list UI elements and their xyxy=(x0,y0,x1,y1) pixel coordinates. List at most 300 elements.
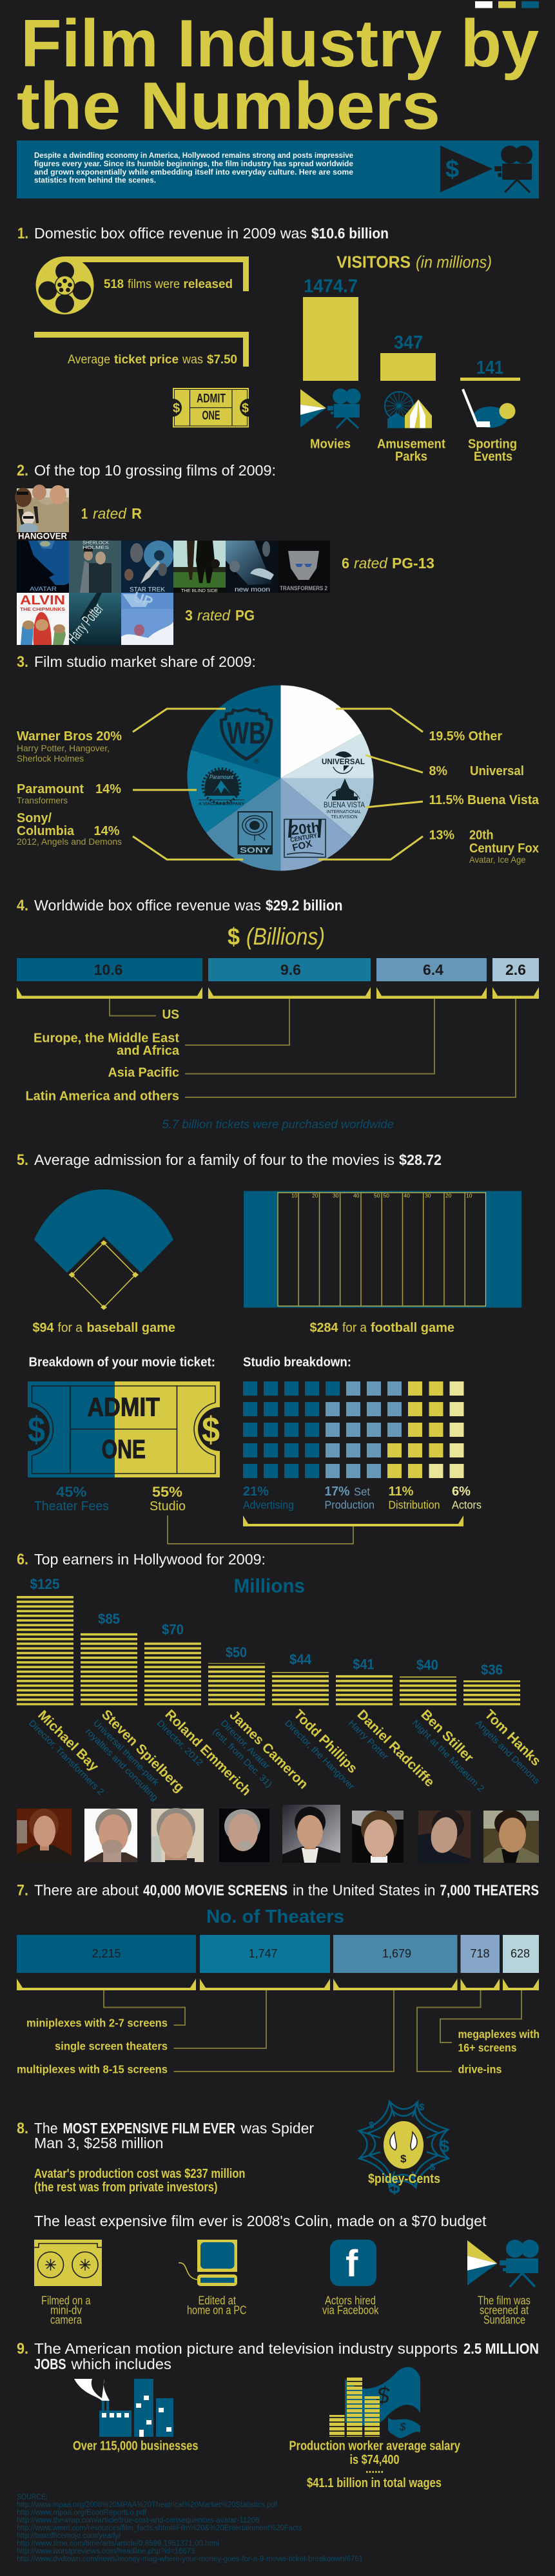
logo: 20th Century Fox: CENTURY xyxy=(290,832,318,844)
icon: football field: 20 xyxy=(312,1192,318,1198)
labels: left studios: Sherlock Holmes xyxy=(17,753,84,764)
heading 8: Man 3, $258 million xyxy=(34,2135,164,2151)
bar chart: visitors: 347 xyxy=(394,332,423,353)
region labels: US xyxy=(162,1008,179,1022)
icon: spidey-cents: $ xyxy=(400,2153,407,2165)
posters: PG-13 rated: SHERLOCK xyxy=(83,541,109,545)
region labels xyxy=(26,1008,180,1103)
logo: Warner Bros: WB xyxy=(227,716,266,751)
labels: right studios xyxy=(429,729,540,865)
icon: spidey-cents: $ xyxy=(430,2162,436,2173)
logo: Universal: UNIVERSAL xyxy=(322,758,365,766)
labels: left studios: 2012, Angels and Demons xyxy=(17,836,122,847)
icon: spidey-cents: $ xyxy=(389,2175,400,2198)
pie leader lines xyxy=(133,709,423,860)
icon: admit one ticket: ONE xyxy=(202,409,220,423)
portrait: Steven Spielberg xyxy=(84,1809,137,1862)
stacked bar: worldwide revenue: 9.6 xyxy=(280,961,301,978)
bar chart: top earners: $85 xyxy=(98,1611,120,1627)
label: 6 rated PG-13: PG-13 xyxy=(392,555,434,572)
posters: PG rated: THE CHIPMUNKS xyxy=(20,606,65,612)
bar chart: top earners: $70 xyxy=(162,1621,184,1638)
slice: Other xyxy=(281,686,362,778)
icon: large ticket split: ADMIT xyxy=(88,1392,160,1421)
portraits row xyxy=(17,1805,539,1863)
rotated earner names: James Cameron xyxy=(226,1707,311,1792)
posters: PG-13 rated: new moon xyxy=(235,586,270,593)
note: avatar cost: (the rest was from private investors) xyxy=(34,2180,218,2195)
slice: 20th Century Fox xyxy=(281,778,352,871)
icon: large ticket split: ONE xyxy=(102,1434,146,1464)
icon: projector camera xyxy=(467,2240,539,2287)
bar chart: top earners: $36 xyxy=(481,1662,503,1678)
labels: studio breakdown: Set xyxy=(354,1485,370,1498)
stacked bar: theaters: 1,747 xyxy=(248,1947,278,1960)
posters: PG-13 rated: STAR TREK xyxy=(130,586,165,593)
label: 6 rated PG-13: rated xyxy=(354,555,388,572)
heading 8: MOST EXPENSIVE FILM EVER xyxy=(63,2120,235,2137)
slice: Universal xyxy=(281,733,374,778)
icon: football field: 50 xyxy=(374,1192,380,1198)
subheading: studio breakdown: Studio breakdown: xyxy=(243,1356,351,1370)
icon: football field: 30 xyxy=(425,1192,431,1198)
captions: how Colin was made: screened at xyxy=(480,2304,529,2317)
UP title: UP xyxy=(131,588,155,610)
region labels: Europe, the Middle East xyxy=(34,1031,179,1045)
caption: wages: $41.1 billion in total wages xyxy=(307,2476,442,2490)
captions: how Colin was made: Sundance xyxy=(483,2313,525,2326)
heading 9: 9. xyxy=(17,2340,28,2358)
icon: facebook: f xyxy=(346,2243,358,2285)
rotated earner names: Daniel Radcliffe xyxy=(354,1707,437,1790)
captions: how Colin was made: Filmed on a xyxy=(41,2294,91,2307)
labels: ticket split: 45% xyxy=(56,1484,86,1500)
labels: left studios: Harry Potter, Hangover, xyxy=(17,743,110,753)
label: 3 rated PG: rated xyxy=(197,607,231,624)
heading 4 xyxy=(17,897,343,914)
sources: http://www.dvdtown.com/news/money-mag-where-your-money-goes-for-a-9-movie-ticket-breakdown/6761 xyxy=(17,2555,363,2563)
ticket price bracket xyxy=(34,332,249,367)
logo: Paramount: Paramount xyxy=(209,774,233,781)
stacked bar: worldwide revenue xyxy=(17,958,539,981)
icon: dollar projector camera xyxy=(440,146,532,192)
label: baseball cost: baseball game xyxy=(86,1321,175,1335)
labels: ticket split: Studio xyxy=(150,1499,186,1514)
rotated earner names: royalties and consulting xyxy=(84,1726,161,1803)
label: 6 rated PG-13 xyxy=(342,555,434,572)
logo: Warner Bros: ® xyxy=(254,758,259,765)
logo: Sony xyxy=(239,812,272,854)
labels: studio breakdown: Advertising xyxy=(243,1499,294,1512)
label: football cost xyxy=(309,1321,454,1335)
icon: spidey-cents: $ xyxy=(419,2102,425,2113)
icon: admit one ticket: $ xyxy=(173,401,180,416)
posters: PG-13 rated: HOLMES xyxy=(83,544,109,550)
labels: left studios: Columbia xyxy=(17,824,75,838)
sources: http://www.mpaa.org/EconReportLo.pdf xyxy=(17,2509,147,2517)
logo: 20th Century Fox xyxy=(284,819,326,857)
icon: large ticket split: $ xyxy=(28,1409,45,1450)
label: baseball cost xyxy=(32,1321,175,1335)
chart title: billions: (Billions) xyxy=(246,923,325,950)
stacked bar: theaters: 2,215 xyxy=(92,1947,121,1960)
heading 5: 5. xyxy=(17,1151,28,1169)
logo: 20th Century Fox: FOX xyxy=(291,838,313,854)
label: 3 rated PG xyxy=(185,607,255,624)
logo: Buena Vista: INTERNATIONAL xyxy=(326,809,361,814)
posters: PG rated: ALVIN xyxy=(20,593,65,608)
posters: PG-13 rated: TRANSFORMERS 2 xyxy=(280,585,327,592)
films released text: films were xyxy=(128,278,180,291)
theater leader lines xyxy=(104,1990,521,2071)
caption: wages: Production worker average salary xyxy=(289,2439,461,2454)
title: the Numbers xyxy=(17,69,440,144)
bar chart: visitors xyxy=(303,276,520,381)
captions: how Colin was made: Actors hired xyxy=(325,2294,376,2307)
bar chart: top earners: $40 xyxy=(416,1657,438,1673)
films released text: 518 xyxy=(104,278,124,291)
studio bracket and leader xyxy=(168,1515,463,1544)
title xyxy=(17,6,539,144)
note: tickets purchased: 5.7 billion tickets were purchased worldwide xyxy=(162,1118,394,1131)
captions: how Colin was made: Edited at xyxy=(199,2294,236,2307)
labels: studio breakdown: 11% xyxy=(388,1485,414,1499)
labels: studio breakdown xyxy=(243,1485,482,1512)
label: 3 rated PG: PG xyxy=(235,607,255,624)
rotated earner names: Michael Bay xyxy=(35,1707,102,1774)
label: 1 rated R: R xyxy=(131,505,142,522)
logo: Paramount xyxy=(199,769,245,807)
icon: spidey-cents: $ xyxy=(440,2137,449,2156)
visitor category labels xyxy=(310,437,517,464)
slice: Paramount xyxy=(187,750,281,832)
labels: right studios: 19.5% Other xyxy=(429,729,502,744)
slice: Buena Vista xyxy=(281,778,374,837)
labels: left studios: 14% xyxy=(95,782,121,796)
sources: http://www.worstpreviews.com/headline.php?id=16673 xyxy=(17,2548,195,2555)
rotated earner names: (est. from Dec. 31) xyxy=(211,1726,275,1789)
rotated earner names: Steven Spielberg xyxy=(99,1707,187,1795)
icon: football field xyxy=(244,1191,521,1308)
heading 7: 40,000 MOVIE SCREENS xyxy=(143,1881,287,1898)
region labels: and Africa xyxy=(117,1044,180,1058)
logo: 20th Century Fox: 20th xyxy=(290,819,321,838)
rotated earner names: Director, 2012 xyxy=(155,1718,206,1768)
labels: left studios: Sony/ xyxy=(17,811,52,825)
stacked bar: worldwide revenue: 2.6 xyxy=(505,961,526,978)
icon: football field: 50 xyxy=(383,1192,389,1198)
icon: admit one ticket xyxy=(164,388,258,428)
heading 4: $29.2 billion xyxy=(266,897,343,914)
icon: football field: 40 xyxy=(353,1192,360,1198)
stacked bar: worldwide revenue: 10.6 xyxy=(94,961,122,978)
icon: film reel with bracket xyxy=(36,256,249,314)
films released text: released xyxy=(183,278,233,291)
intro text: Despite a dwindling economy in America, Hollywood remains strong and posts impressive xyxy=(34,152,353,160)
rotated earner names: Director, Transformers 2 xyxy=(27,1718,106,1797)
portrait: Todd Phillips xyxy=(282,1805,340,1863)
labels: left studios: Transformers xyxy=(17,795,68,805)
heading 1: $10.6 billion xyxy=(311,225,389,242)
icon: amusement park xyxy=(385,392,432,428)
portrait: Michael Bay xyxy=(17,1809,72,1863)
chart title: billions: $ xyxy=(228,923,240,950)
visitor category labels: Events xyxy=(474,450,512,464)
icon: large ticket split: $ xyxy=(202,1409,220,1450)
icon: football field: 40 xyxy=(404,1192,410,1198)
brackets xyxy=(17,1979,539,1990)
labels: left studios: Warner Bros 20% xyxy=(17,729,122,744)
icon: baseball field xyxy=(34,1189,173,1310)
slice: Warner Bros xyxy=(191,685,281,778)
posters: PG-13 rated: AVATAR xyxy=(30,586,57,592)
stacked bar: theaters: 628 xyxy=(511,1947,530,1960)
visitor category labels: Movies xyxy=(310,437,351,451)
icon: football field: 10 xyxy=(291,1192,298,1198)
rotated earner names: Angels and Demons xyxy=(474,1718,542,1786)
icon: movies xyxy=(300,389,361,428)
heading 8: was Spider xyxy=(240,2120,314,2137)
icon: computer xyxy=(179,2240,237,2286)
stacked bar: theaters: 1,679 xyxy=(382,1947,411,1960)
icon: football field: 10 xyxy=(466,1192,472,1198)
labels: studio breakdown: Production xyxy=(325,1499,375,1512)
captions: how Colin was made: via Facebook xyxy=(322,2304,379,2317)
icon: admit one ticket: $ xyxy=(242,401,249,416)
sources: http://boxofficemojo.com/yearly/ xyxy=(17,2532,121,2540)
rotated earner names: Ben Stiller xyxy=(418,1707,476,1765)
waffle chart: studio breakdown xyxy=(243,1381,464,1478)
sources: http://www.thewrap.com/article/true-cost-and-consequences-avatar-11206 xyxy=(17,2517,259,2524)
stacked bar: worldwide revenue: 6.4 xyxy=(423,961,443,978)
icon: spidey-cents: $pidey-Cents xyxy=(368,2172,440,2186)
stacked bar: theaters xyxy=(17,1935,539,1973)
intro text: and grown exponentially while embedding itself into everyday culture. Here are some xyxy=(34,169,353,177)
posters: PG-13 rated: THE BLIND SIDE xyxy=(181,588,218,593)
heading 7: in the United States in xyxy=(293,1881,436,1898)
labels: right studios: 20th xyxy=(469,829,494,843)
label: football cost: $284 xyxy=(309,1321,338,1335)
label: baseball cost: $94 xyxy=(32,1321,54,1335)
intro text: statistics from behind the scenes. xyxy=(34,177,156,184)
posters: R rated xyxy=(15,485,69,541)
label: 6 rated PG-13: 6 xyxy=(342,555,349,572)
heading 8 xyxy=(17,2120,314,2151)
theater labels: miniplexes with 2-7 screens xyxy=(26,2017,168,2030)
films released text xyxy=(104,278,233,291)
logo: Warner Bros xyxy=(220,707,273,765)
icon: money and coins xyxy=(329,2367,420,2438)
portrait: James Cameron xyxy=(219,1809,269,1862)
visitor category labels: Amusement xyxy=(377,437,445,451)
icon: money and coins: $ xyxy=(376,2382,390,2408)
labels: studio breakdown: 17% xyxy=(325,1485,350,1499)
icon: sporting events xyxy=(463,389,516,428)
icon: spidey-cents: $ xyxy=(369,2120,375,2131)
portrait: Ben Stiller xyxy=(418,1809,471,1863)
icon: mini-dv tape xyxy=(34,2240,102,2286)
heading 1: 1. xyxy=(17,225,28,242)
icon: admit one ticket: ADMIT xyxy=(197,392,226,406)
bar chart: visitors: 1474.7 xyxy=(304,276,358,296)
heading 7: 7. xyxy=(17,1881,28,1899)
rotated earner names: Director, Avatar xyxy=(219,1718,272,1771)
intro text xyxy=(34,152,353,184)
label: 1 rated R: 1 xyxy=(81,505,88,522)
captions: how Colin was made xyxy=(41,2294,531,2326)
theater labels xyxy=(17,2017,540,2076)
logo: Buena Vista: TELEVISION xyxy=(331,814,357,820)
caption: businesses: Over 115,000 businesses xyxy=(73,2439,199,2454)
theater labels: multiplexes with 8-15 screens xyxy=(17,2063,168,2076)
heading 1: Domestic box office revenue in 2009 was xyxy=(34,225,307,242)
labels: studio breakdown: Distribution xyxy=(388,1499,440,1512)
intro text: figures every year. Since its humble beginnings, the film industry has spread worldwide xyxy=(34,160,353,168)
icon: football field: 20 xyxy=(445,1192,452,1198)
logo: Buena Vista: BUENA VISTA xyxy=(324,800,365,809)
least expensive film line: The least expensive film ever is 2008's Colin, made on a $70 budget xyxy=(34,2213,487,2229)
sources: SOURCE: xyxy=(17,2494,48,2501)
heading 9: JOBS xyxy=(34,2356,66,2372)
label: 1 rated R xyxy=(81,505,142,522)
portrait: Roland Emmerich xyxy=(151,1808,204,1862)
labels: studio breakdown: Actors xyxy=(452,1499,482,1512)
labels: studio breakdown: 21% xyxy=(243,1485,269,1499)
heading 3: 3. xyxy=(17,653,28,671)
bar chart: top earners: $41 xyxy=(353,1656,374,1673)
bar chart: top earners: $50 xyxy=(226,1644,247,1660)
theater labels: 16+ screens xyxy=(458,2041,517,2054)
labels: right studios: 13% xyxy=(429,829,454,843)
captions: how Colin was made: home on a PC xyxy=(187,2304,246,2317)
region labels: Latin America and others xyxy=(26,1089,179,1103)
rotated earner names: Tom Hanks xyxy=(482,1707,543,1769)
heading 7: There are about xyxy=(34,1881,139,1898)
colour swatches xyxy=(475,1,539,8)
captions: how Colin was made: camera xyxy=(50,2313,83,2326)
note: avatar cost xyxy=(34,2167,245,2195)
heading 4: Worldwide box office revenue was xyxy=(34,897,261,914)
icon: dollar projector camera: $ xyxy=(445,156,459,183)
label: football cost: for a xyxy=(342,1321,367,1335)
theater labels: drive-ins xyxy=(458,2063,502,2076)
icon: large ticket split xyxy=(0,1381,246,1477)
brackets xyxy=(17,987,539,999)
icon: money and coins: $ xyxy=(399,2421,406,2433)
heading 6: 6. xyxy=(17,1551,28,1568)
ticket price text: was xyxy=(182,353,203,367)
labels: right studios: Universal xyxy=(470,764,524,778)
heading 2: Of the top 10 grossing films of 2009: xyxy=(34,462,276,479)
chart title: millions: Millions xyxy=(233,1575,305,1597)
portrait: Daniel Radcliffe xyxy=(352,1811,404,1863)
region leader lines xyxy=(110,999,516,1097)
sources: http://www.wmm.com/resources/film_facts.shtml#Film%20&%20Entertainment%20Facts xyxy=(17,2524,302,2532)
heading 7 xyxy=(17,1881,539,1899)
labels: right studios: Avatar, Ice Age xyxy=(469,854,526,865)
logo: Universal xyxy=(322,751,365,773)
rotated earner names: Harry Potter xyxy=(347,1718,391,1762)
label: baseball cost: for a xyxy=(58,1321,83,1335)
caption: wages: ...... xyxy=(365,2462,384,2476)
region labels: Asia Pacific xyxy=(108,1066,179,1080)
sources xyxy=(17,2494,363,2563)
rotated earner names: Todd Phillips xyxy=(291,1707,360,1776)
rotated earner names: Director, the Hangover xyxy=(283,1718,357,1792)
pie chart: market share xyxy=(187,685,374,871)
labels: right studios: 8% xyxy=(429,764,447,778)
heading 2: 2. xyxy=(17,462,28,479)
labels: left studios: 14% xyxy=(94,824,120,838)
heading 5: Average admission for a family of four to the movies is xyxy=(34,1151,394,1168)
labels: ticket split xyxy=(34,1484,186,1514)
sources: http://www.time.com/time/arts/article/0,8599,1951371,00.html xyxy=(17,2540,219,2548)
label: 3 rated PG: 3 xyxy=(185,607,193,624)
ticket price text: $7.50 xyxy=(207,353,237,367)
icon: facebook xyxy=(330,2240,376,2286)
posters: PG rated xyxy=(17,588,173,647)
bar chart: top earners xyxy=(17,1576,520,1706)
intro banner xyxy=(17,140,539,198)
slice: Sony xyxy=(206,778,281,871)
visitors heading xyxy=(336,253,492,272)
icon: football field: 30 xyxy=(333,1192,339,1198)
title: Film Industry by xyxy=(21,6,539,81)
icon: factory and city xyxy=(74,2379,173,2437)
heading 6: Top earners in Hollywood for 2009: xyxy=(34,1551,266,1568)
portrait: Tom Hanks xyxy=(483,1810,539,1863)
posters: PG-13 rated xyxy=(17,541,330,593)
heading 5: $28.72 xyxy=(399,1151,442,1168)
ticket price text: Average xyxy=(68,353,110,367)
labels: left studios xyxy=(17,729,122,847)
icon: spidey-cents xyxy=(359,2101,449,2198)
sources: http://www.mpaa.org/2008%20MPAA%20Theatrical%20Market%20Statistics.pdf xyxy=(17,2501,278,2509)
theater labels: single screen theaters xyxy=(55,2040,168,2053)
captions: how Colin was made: mini-dv xyxy=(50,2304,82,2317)
theater labels: megaplexes with xyxy=(458,2028,540,2041)
labels: left studios: Paramount xyxy=(17,782,84,796)
heading 8: The xyxy=(34,2120,58,2137)
heading 9: which includes xyxy=(70,2356,171,2372)
heading 9: The American motion picture and television industry supports xyxy=(34,2340,458,2357)
labels: ticket split: 55% xyxy=(152,1484,182,1500)
posters: R rated: HANGOVER xyxy=(18,531,67,541)
caption: wages xyxy=(289,2439,461,2490)
labels: right studios: Century Fox xyxy=(469,841,539,856)
bar chart: top earners: $44 xyxy=(289,1651,312,1668)
captions: how Colin was made: The film was xyxy=(478,2294,531,2307)
note: avatar cost: Avatar's production cost was $237 million xyxy=(34,2167,245,2181)
visitors heading: (in millions) xyxy=(416,253,492,272)
labels: studio breakdown: 6% xyxy=(452,1485,471,1499)
logo: Buena Vista xyxy=(324,778,365,820)
label: 1 rated R: rated xyxy=(93,505,127,522)
caption: wages: is $74,400 xyxy=(349,2453,400,2467)
visitor category labels: Parks xyxy=(395,450,427,464)
rotated earner names: Universal theme-park xyxy=(92,1718,162,1788)
label: football cost: football game xyxy=(371,1321,454,1335)
visitor category labels: Sporting xyxy=(468,437,517,451)
posters: PG rated: Harry Potter xyxy=(64,600,107,647)
rotated earner names: Roland Emmerich xyxy=(162,1707,254,1798)
rotated earner names xyxy=(27,1707,543,1803)
labels: right studios: 11.5% Buena Vista xyxy=(429,793,540,807)
labels: ticket split: Theater Fees xyxy=(34,1499,109,1514)
ticket price text xyxy=(68,353,237,367)
ticket price text: ticket price xyxy=(114,353,179,367)
rotated earner names: Night at the Museum 2 xyxy=(411,1718,487,1794)
